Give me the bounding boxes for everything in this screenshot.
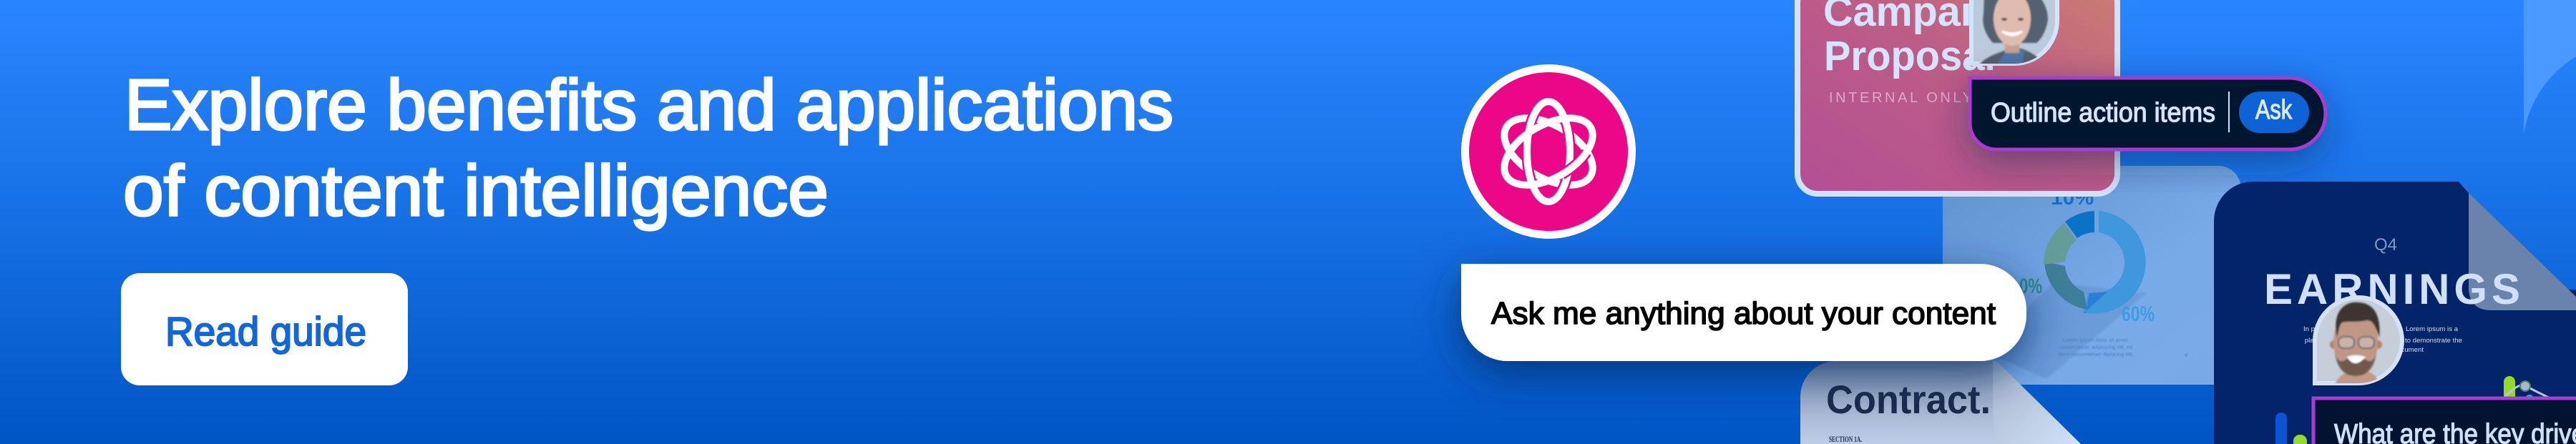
title: [123, 65, 1174, 231]
contract heading: Contract.: [1826, 377, 1991, 422]
campaign heading: Proposal: [1824, 33, 1996, 79]
chat bubble: ask me anything: Ask me anything about your content: [1491, 296, 1996, 331]
title: of content intelligence: [123, 151, 829, 231]
earnings fold: [2469, 193, 2576, 310]
donut labels: [2019, 197, 2154, 322]
lorem caption: consectetuer adipiscing elit, ed: [2059, 344, 2132, 350]
lorem caption: diam nonumtetuer dipiscing elit,: [2058, 351, 2134, 357]
button: read guide: [121, 273, 408, 385]
document: donut chart report: [1943, 166, 2241, 385]
earnings body text: placeholder text commonly used to demonstrate the: [2305, 337, 2462, 345]
Q4 label: Q4: [2374, 235, 2397, 255]
donut chart: [2044, 211, 2146, 314]
decorative corner shape: [2522, 0, 2576, 262]
contract fold: [1993, 361, 2081, 444]
donut labels: 60%: [2122, 302, 2155, 326]
internal only label: INTERNAL ONLY: [1829, 90, 1972, 106]
atom rings: [1493, 102, 1604, 202]
chart bars and line: [2275, 376, 2549, 444]
ask button: Ask: [2255, 95, 2293, 125]
donut labels: 0%: [2019, 275, 2042, 298]
prompt pill: outline action items: [1970, 78, 2326, 149]
donut shadow: [1982, 282, 2147, 379]
lorem caption: d: [2185, 352, 2187, 358]
prompt box: key drivers question: [2313, 398, 2576, 444]
earnings body text: visual form of a document: [2345, 346, 2424, 354]
logo: atom in pink circle: [1465, 69, 1631, 235]
avatar: man: [2315, 297, 2402, 386]
campaign heading: [1823, 0, 2022, 79]
button: read guide: Read guide: [165, 309, 366, 355]
chat bubble: ask me anything: [1461, 264, 2026, 361]
prompt pill: outline action items: Outline action items: [1991, 98, 2215, 128]
earnings heading: EARNINGS: [2264, 265, 2520, 313]
section label: SECTION 1A.: [1829, 434, 1862, 444]
lorem caption: Lorem ipsum dolor sit amet,: [2063, 337, 2129, 343]
title: Explore benefits and applications: [125, 65, 1174, 145]
ask button: [2239, 92, 2309, 133]
document: contract: [1800, 361, 2081, 444]
document: campaign proposal: [1797, 0, 2117, 194]
avatar: woman: [1971, 0, 2057, 66]
earnings body text: [2303, 325, 2462, 354]
document: Q4 earnings: [2214, 182, 2576, 444]
earnings body text: In publishing and graphic design, Lorem ipsum is a: [2303, 325, 2459, 333]
lorem caption: [2058, 337, 2187, 358]
donut labels: 10%: [2051, 186, 2094, 209]
